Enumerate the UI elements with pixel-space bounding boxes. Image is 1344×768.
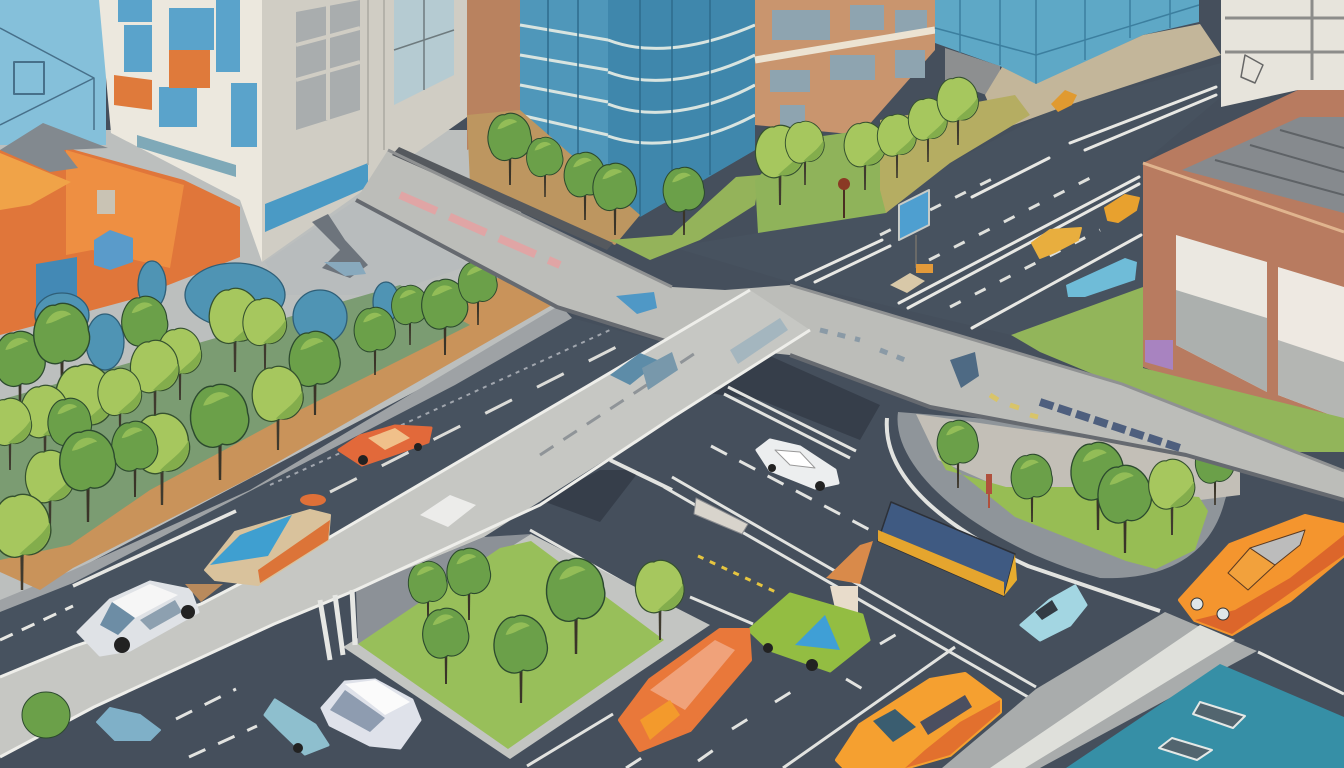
pedestrian figure [986, 474, 992, 508]
car: white sedan [757, 440, 838, 491]
grid windows [296, 0, 360, 130]
car: white van [322, 680, 420, 748]
building: tan apartments [755, 0, 935, 135]
car: orange hatch [620, 630, 750, 750]
orange windows [114, 50, 210, 110]
red round sign [838, 178, 850, 218]
overpass: south-west to north-east [0, 290, 810, 757]
trees: right island [937, 420, 1234, 553]
wall under overpass [356, 534, 531, 644]
building: blue corner [0, 0, 106, 145]
car: orange coupe [339, 426, 431, 465]
debris: truck cab [826, 541, 873, 622]
brown planting: upper centre [467, 110, 640, 245]
road sign: billboard [890, 190, 933, 293]
trees: blue canopies [35, 261, 399, 370]
island curb [343, 534, 710, 759]
vehicles: upper right road [1032, 90, 1139, 297]
building: blue glass tower [520, 0, 755, 217]
grey roof [0, 123, 108, 172]
grey side wall [262, 0, 467, 262]
car: blue small [97, 708, 160, 740]
teal plaza [1066, 664, 1344, 768]
lawn under trees [0, 285, 470, 560]
island curb [898, 412, 1235, 578]
ground behind left buildings [0, 130, 570, 610]
building: brown warehouse [1143, 90, 1344, 445]
left road markings [0, 330, 640, 640]
tan roadside wall: upper right [985, 24, 1221, 130]
lower road markings [176, 387, 1344, 768]
upper right lane markings [796, 87, 1216, 328]
grass [938, 455, 1208, 569]
wall [916, 414, 1240, 500]
green lawn: upper right [755, 125, 900, 233]
large windows [394, 0, 454, 105]
car: silver SUV [78, 582, 198, 655]
bottom island [343, 534, 710, 759]
forecourt [265, 200, 470, 295]
bus: blue and orange [185, 494, 330, 602]
yellow roof [0, 153, 71, 210]
lower blue strip [137, 135, 236, 177]
right lawn [1011, 287, 1344, 452]
tree row: upper right [755, 77, 978, 205]
barrier: lower centre [694, 498, 748, 534]
blue cube [94, 230, 133, 270]
building: glass row [935, 0, 1199, 100]
ramp stripes [320, 590, 355, 660]
tree row: upper centre [488, 113, 704, 235]
overpass debris [610, 292, 979, 390]
building: orange brick [0, 123, 240, 335]
brick strip beside tower [467, 0, 520, 150]
building: white block [1221, 0, 1344, 107]
tan lawn: upper right [880, 95, 1030, 213]
car: big orange [1180, 516, 1344, 634]
left road [0, 318, 672, 690]
door [36, 257, 77, 310]
car: orange sports [837, 674, 1000, 768]
grass [358, 541, 664, 749]
right island [898, 412, 1240, 578]
car: green [749, 594, 869, 671]
lone tree: bottom left [22, 692, 70, 738]
purple door [1145, 340, 1173, 370]
car: light blue [265, 700, 328, 754]
shadow under overpass [540, 356, 880, 522]
building: cream office [99, 0, 467, 262]
roof [1182, 117, 1344, 213]
soil bed [0, 275, 552, 590]
truck: blue and yellow [878, 502, 1017, 596]
small window [97, 190, 115, 214]
crossing stripes [420, 495, 476, 527]
trees: bottom island [408, 548, 684, 703]
lower right ramp [942, 612, 1257, 768]
left curb [0, 305, 572, 612]
tree cluster: left [0, 261, 497, 590]
upper right road [672, 63, 1221, 335]
left window [1176, 235, 1267, 392]
car: teal compact [1021, 586, 1086, 640]
green strip: upper centre [610, 175, 760, 260]
glazed base strip [265, 163, 368, 232]
overpass: north-west to south-east [356, 147, 1344, 500]
right inner road curve [887, 418, 1160, 611]
parked grey car [312, 214, 368, 278]
blue windows [118, 0, 257, 147]
right window [1278, 267, 1344, 420]
